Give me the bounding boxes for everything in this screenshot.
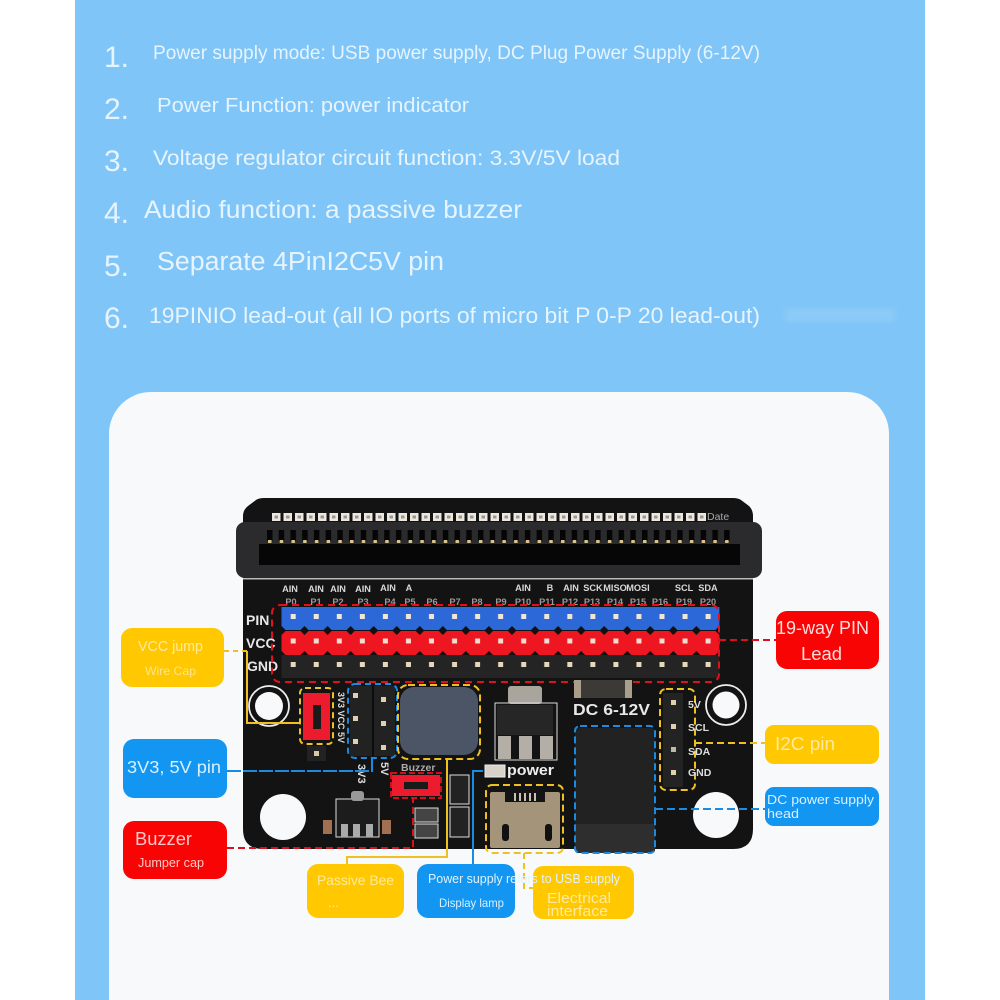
item 6: 19PINIO lead-out (all IO ports of micro bit P 0-P 20 lead-out) bbox=[149, 303, 760, 328]
i2c header bbox=[660, 689, 712, 790]
item 6 bbox=[104, 302, 760, 335]
pin labels: P8 bbox=[471, 597, 483, 607]
callout: dc power supply head bbox=[765, 787, 879, 826]
3v3 5v headers bbox=[348, 684, 397, 784]
connector lines bbox=[224, 640, 776, 864]
pin labels: AIN bbox=[330, 584, 346, 594]
mounting holes bbox=[249, 685, 746, 840]
item 4: 4. bbox=[104, 197, 129, 230]
red vcc pin row bbox=[282, 631, 719, 655]
callout: 19-way pin bbox=[776, 611, 879, 669]
3v3 5v headers: 5V bbox=[378, 762, 390, 776]
vcc jumper bbox=[300, 688, 346, 761]
feature list bbox=[104, 41, 760, 335]
pin labels: P19 bbox=[676, 597, 692, 607]
item 3: 3. bbox=[104, 145, 129, 178]
usb connector line bbox=[524, 853, 533, 888]
pin labels: P4 bbox=[384, 597, 397, 607]
red lines bbox=[227, 640, 776, 848]
callout: vcc jump bbox=[121, 628, 224, 687]
pin labels: AIN bbox=[355, 584, 371, 594]
pin row labels: VCC bbox=[246, 635, 276, 651]
callout: dc power supply head: head bbox=[767, 806, 799, 821]
pin labels: P10 bbox=[515, 597, 531, 607]
pin row labels: GND bbox=[247, 658, 278, 674]
pin labels bbox=[282, 583, 718, 607]
regulator top bbox=[495, 686, 557, 760]
item 5: Separate 4PinI2C5V pin bbox=[157, 248, 444, 276]
overlapping power supply caption: Power supply refers to USB supply bbox=[428, 871, 620, 886]
callout: 19-way pin: 19-way PIN bbox=[776, 618, 869, 638]
pin row labels: PIN bbox=[246, 612, 269, 628]
callout: 3v3 5v pin: 3V3, 5V pin bbox=[127, 757, 221, 777]
white card bbox=[109, 392, 889, 1000]
pin labels: P1 bbox=[310, 597, 322, 607]
gold pads bbox=[271, 513, 708, 521]
pin labels: P3 bbox=[357, 597, 369, 607]
item 1: 1. bbox=[104, 41, 129, 74]
item 4: Audio function: a passive buzzer bbox=[144, 196, 522, 224]
diode bbox=[574, 680, 632, 698]
i2c header: SDA bbox=[688, 746, 711, 758]
pin labels: P13 bbox=[584, 597, 600, 607]
date mark: Date bbox=[707, 511, 729, 523]
item 1 bbox=[104, 41, 760, 74]
3v3 5v headers: 3V3 bbox=[355, 764, 367, 784]
pin labels: SDA bbox=[698, 583, 718, 593]
pin labels: A bbox=[406, 583, 413, 593]
pin labels: B bbox=[547, 583, 554, 593]
item 1: Power supply mode: USB power supply, DC Plug Power Supply (6-12V) bbox=[153, 42, 760, 64]
pin labels: P11 bbox=[539, 597, 555, 607]
pin labels: P9 bbox=[495, 597, 507, 607]
pin labels: AIN bbox=[515, 583, 531, 593]
faint smudge bbox=[785, 308, 895, 322]
item 2: 2. bbox=[104, 93, 129, 126]
callout: dc power supply head: DC power supply bbox=[767, 792, 875, 807]
pin labels: P0 bbox=[285, 597, 297, 607]
i2c header: 5V bbox=[688, 699, 701, 711]
pin labels: MOSI bbox=[626, 583, 650, 593]
yellow lines bbox=[224, 651, 765, 864]
buzzer jumper bbox=[391, 762, 441, 798]
item 5: 5. bbox=[104, 250, 129, 283]
pin labels: AIN bbox=[380, 583, 396, 593]
pin labels: P14 bbox=[607, 597, 624, 607]
callout: passive bee bbox=[307, 864, 404, 918]
callout: 3v3 5v pin bbox=[123, 739, 227, 798]
blue signal pin row bbox=[282, 607, 719, 630]
buzzer bbox=[398, 685, 480, 759]
item 3 bbox=[104, 145, 620, 178]
i2c header: SCL bbox=[688, 722, 710, 734]
regulator bottom left bbox=[323, 791, 391, 837]
item 2 bbox=[104, 93, 469, 126]
callout: buzzer: Jumper cap bbox=[138, 856, 204, 870]
dc jack bbox=[575, 726, 655, 853]
callout: 19-way pin: Lead bbox=[801, 644, 842, 664]
power led and label bbox=[485, 762, 554, 779]
pin labels: P20 bbox=[700, 597, 716, 607]
item 6: 6. bbox=[104, 302, 129, 335]
callout: display lamp: Display lamp bbox=[439, 896, 504, 910]
pin row labels bbox=[246, 612, 278, 674]
item 3: Voltage regulator circuit function: 3.3V/5V load bbox=[153, 146, 620, 170]
callout: electrical interface: interface bbox=[547, 903, 608, 920]
callout: vcc jump: Wire Cap bbox=[145, 664, 196, 678]
pin labels: P5 bbox=[404, 597, 416, 607]
i2c header: GND bbox=[688, 767, 712, 779]
board bbox=[236, 498, 762, 853]
usb port bbox=[486, 785, 563, 853]
vcc jumper: 3V3 VCC 5V bbox=[336, 692, 346, 743]
blue lines bbox=[227, 757, 765, 864]
resistors bbox=[415, 808, 438, 838]
pin labels: P12 bbox=[562, 597, 578, 607]
pin labels: AIN bbox=[308, 584, 324, 594]
pin labels: SCK bbox=[583, 583, 603, 593]
callout: buzzer bbox=[123, 821, 227, 879]
callout: i2c pin: I2C pin bbox=[775, 734, 835, 754]
pin labels: AIN bbox=[563, 583, 579, 593]
callout: display lamp bbox=[417, 864, 515, 918]
callout: passive bee: Passive Bee bbox=[317, 872, 394, 888]
pin labels: P6 bbox=[426, 597, 438, 607]
callout: buzzer: Buzzer bbox=[135, 829, 192, 849]
item 2: Power Function: power indicator bbox=[157, 94, 469, 117]
pin labels: P15 bbox=[630, 597, 646, 607]
callout: vcc jump: VCC jump bbox=[138, 639, 203, 655]
pin labels: AIN bbox=[282, 584, 298, 594]
callout: electrical interface bbox=[533, 866, 634, 920]
callout: i2c pin bbox=[765, 725, 879, 764]
callout: passive bee: ... bbox=[328, 895, 339, 910]
power led and label: power bbox=[507, 762, 554, 779]
connector bbox=[236, 522, 762, 580]
buzzer jumper: Buzzer bbox=[401, 762, 435, 774]
transistors bbox=[450, 775, 469, 837]
pin labels: P7 bbox=[449, 597, 461, 607]
pin labels: SCL bbox=[675, 583, 694, 593]
pin labels: MISO bbox=[603, 583, 627, 593]
callout: electrical interface: Electrical bbox=[547, 890, 611, 907]
pin labels: P16 bbox=[652, 597, 668, 607]
pcb bbox=[243, 498, 753, 849]
dc label: DC 6-12V bbox=[573, 702, 651, 719]
black gnd pin row bbox=[282, 655, 719, 678]
red dashed pin frame bbox=[272, 605, 719, 682]
item 5 bbox=[104, 248, 444, 283]
pin labels: P2 bbox=[332, 597, 344, 607]
